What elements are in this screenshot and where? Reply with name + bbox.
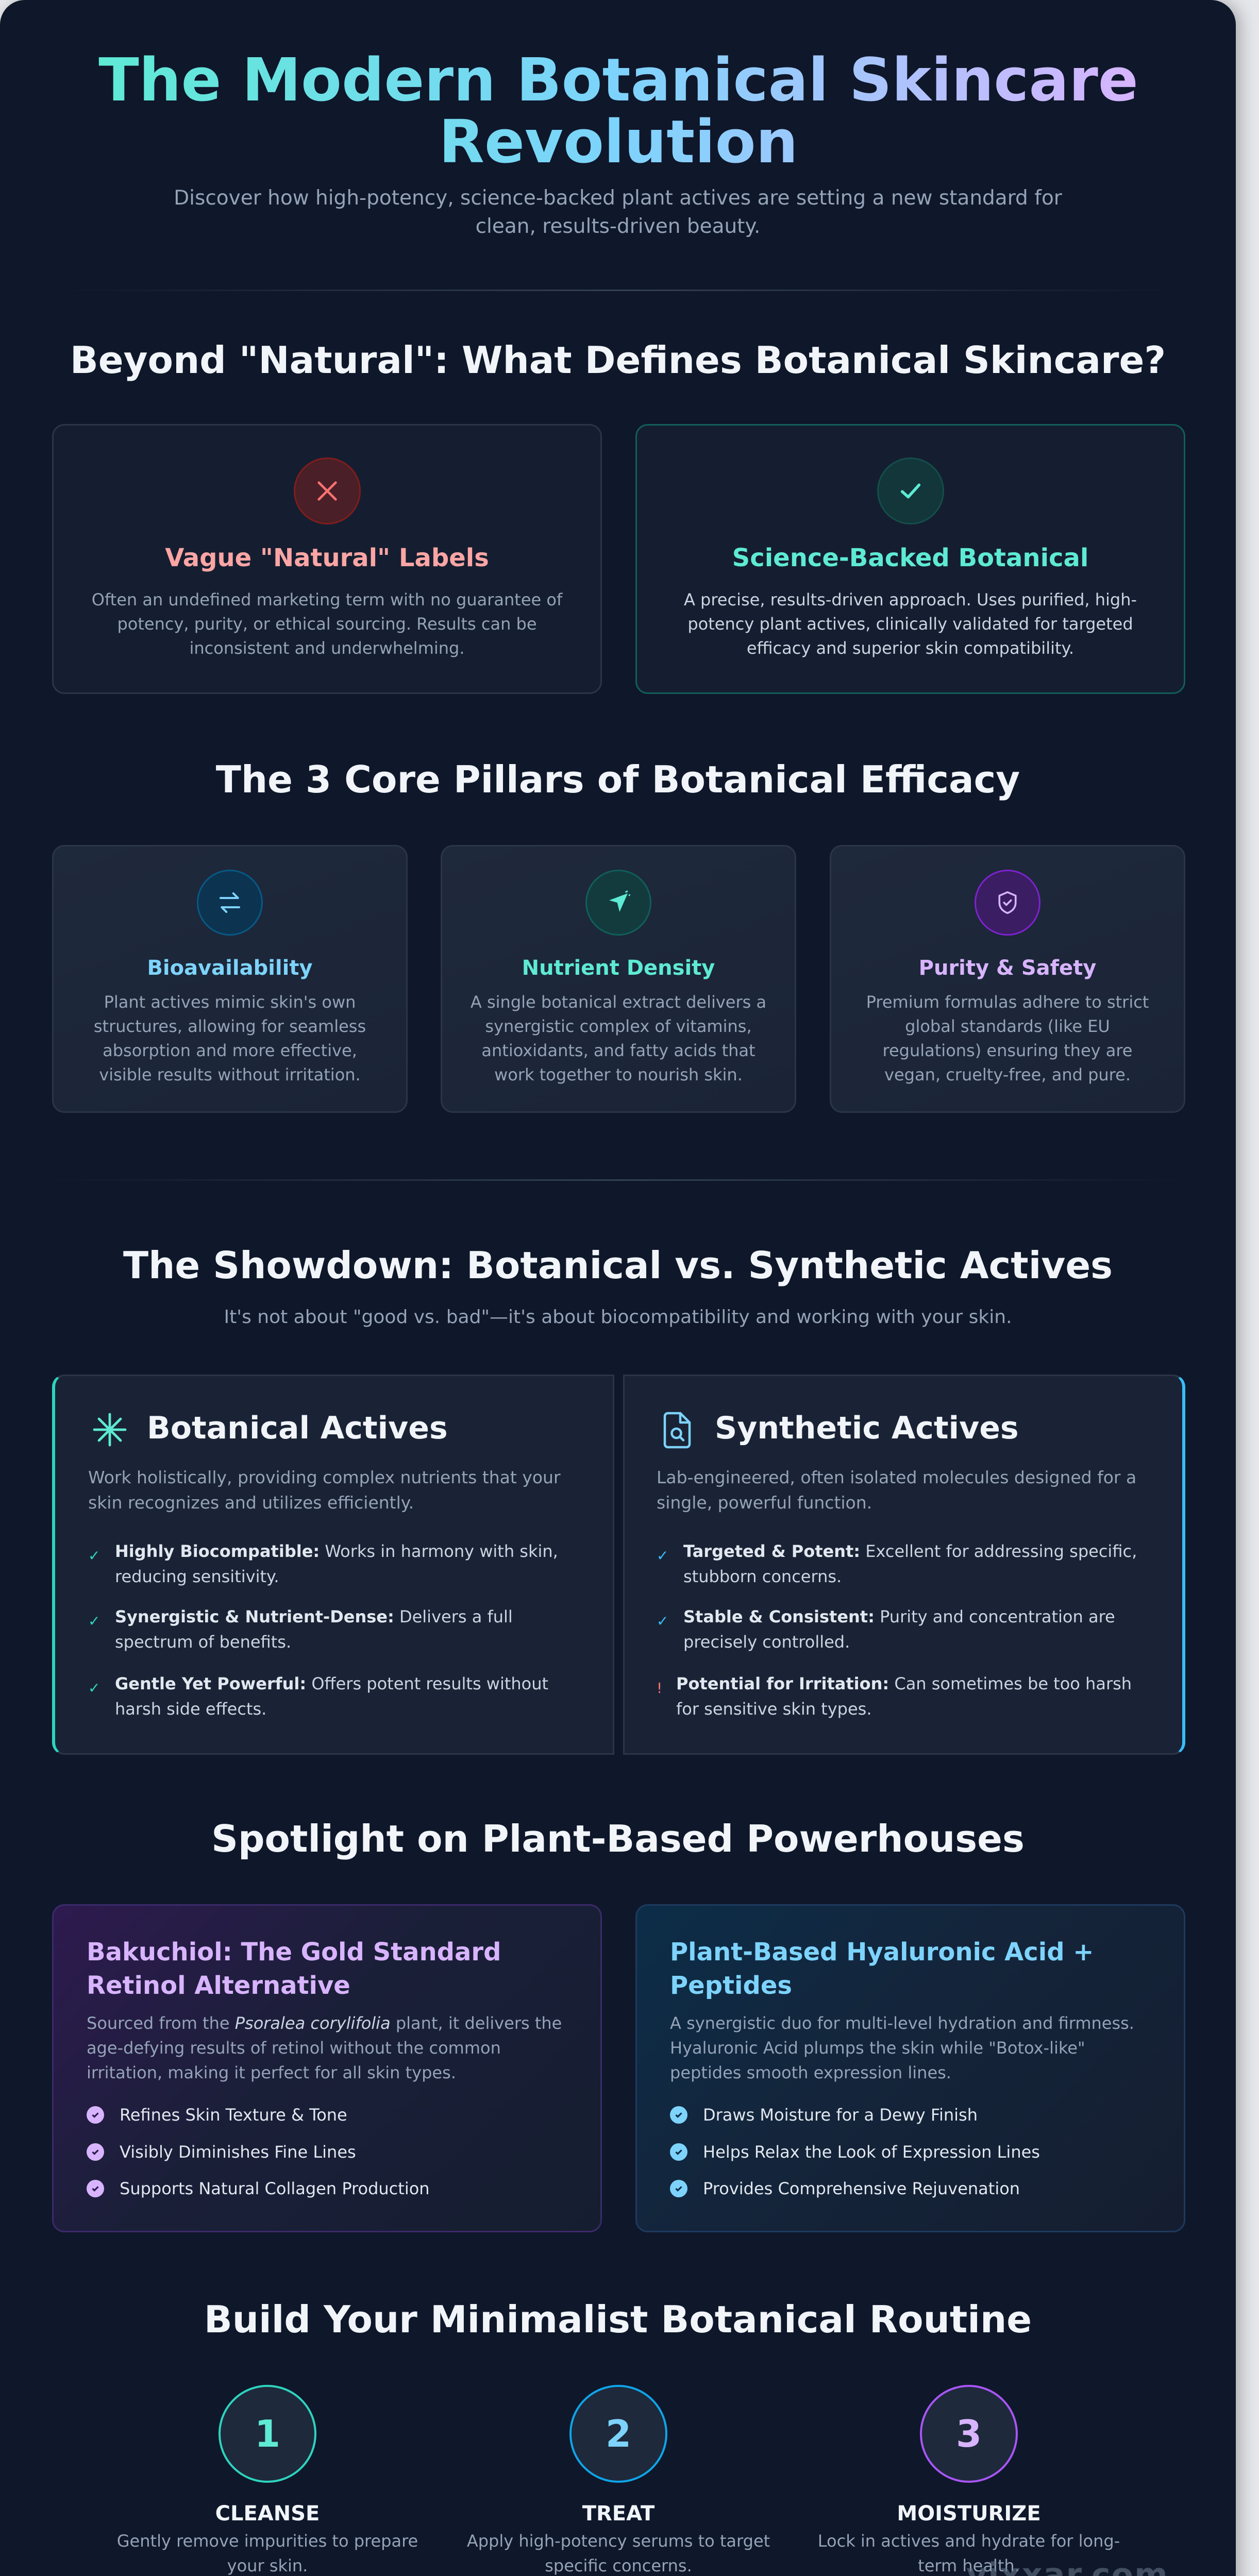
card title: Science-Backed Botanical <box>732 544 1088 572</box>
pillar: nutrient density <box>441 845 796 1113</box>
panel: botanical actives <box>52 1375 614 1755</box>
icon: sparkle <box>93 1413 127 1447</box>
bullets: Gentle Yet Powerful: Offers potent results without harsh side effects. <box>115 1674 548 1719</box>
bullets: Synergistic & Nutrient-Dense: Delivers a full spectrum of benefits. <box>115 1607 513 1652</box>
heading: routine: Build Your Minimalist Botanical Routine <box>204 2298 1032 2341</box>
panel: synthetic actives <box>623 1375 1185 1755</box>
bullets: Refines Skin Texture & Tone <box>120 2105 347 2125</box>
card title: Bakuchiol: The Gold Standard Retinol Alternative <box>87 1938 501 2000</box>
bullets: Stable & Consistent: Purity and concentration are precisely controlled. <box>683 1607 1115 1652</box>
pillar title: Purity & Safety <box>919 956 1096 980</box>
bullets <box>88 1541 558 1719</box>
icon: arrows <box>197 870 263 936</box>
icon: shield <box>975 870 1040 936</box>
bullets <box>670 2105 1040 2198</box>
bullets: Visibly Diminishes Fine Lines <box>120 2142 356 2162</box>
heading: spotlight: Spotlight on Plant-Based Powerhouses <box>211 1817 1025 1860</box>
pillar text: A single botanical extract delivers a synergistic complex of vitamins, antioxidants, and fatty acids that work together to nourish skin. <box>471 992 766 1084</box>
title <box>93 49 1144 173</box>
icon: x <box>294 457 361 524</box>
bullets: Helps Relax the Look of Expression Lines <box>703 2142 1040 2162</box>
bullets: ✓ <box>657 1613 668 1630</box>
step 2: treat <box>467 2385 770 2575</box>
card text: A precise, results-driven approach. Uses purified, high-potency plant actives, clinically validated for targeted efficacy and superior skin compatibility. <box>684 590 1137 658</box>
title: Revolution <box>439 108 798 177</box>
bullets: Targeted & Potent: Excellent for addressing specific, stubborn concerns. <box>683 1541 1137 1586</box>
description: Lab-engineered, often isolated molecules designed for a single, powerful function. <box>657 1467 1136 1513</box>
pillar text: Plant actives mimic skin's own structures, allowing for seamless absorption and more effective, visible results without irritation. <box>94 992 366 1084</box>
bullets: Highly Biocompatible: Works in harmony with skin, reducing sensitivity. <box>115 1541 558 1586</box>
bullets: ✓ <box>657 1547 668 1564</box>
bullets: ! <box>657 1680 662 1697</box>
bullets <box>87 2105 430 2198</box>
card: science-backed botanical <box>635 424 1185 694</box>
pillar title: Bioavailability <box>147 956 313 980</box>
step 1: cleanse <box>117 2385 418 2575</box>
step 1: cleanse: CLEANSE <box>215 2502 320 2526</box>
step 2: treat: Apply high-potency serums to target specific concerns. <box>467 2531 770 2575</box>
number circle: 1 <box>255 2412 280 2455</box>
number circle: 2 <box>606 2412 631 2455</box>
bullets: ✓ <box>88 1680 100 1697</box>
bullets: ✓ <box>88 1613 100 1630</box>
showdown subtitle: It's not about "good vs. bad"—it's about biocompatibility and working with your skin. <box>224 1307 1012 1328</box>
number circle <box>569 2385 667 2483</box>
icon: arrow <box>585 870 651 936</box>
icon: document search <box>664 1412 691 1449</box>
bullets: for sensitive skin types. <box>676 1699 871 1719</box>
step 3: moisturize: Lock in actives and hydrate for long-term health. <box>818 2531 1120 2575</box>
number circle <box>920 2385 1018 2483</box>
bullets: Potential for Irritation: Can sometimes be too harsh <box>676 1674 1132 1693</box>
heading: showdown: The Showdown: Botanical vs. Synthetic Actives <box>123 1244 1113 1287</box>
subtitle: Discover how high-potency, science-backed plant actives are setting a new standard for clean, results-driven beauty. <box>174 187 1062 238</box>
pillar title: Nutrient Density <box>522 956 715 980</box>
number circle <box>219 2385 316 2483</box>
bullets: Provides Comprehensive Rejuvenation <box>703 2179 1020 2198</box>
pillar: purity & safety <box>830 845 1185 1113</box>
card title: Vague "Natural" Labels <box>165 544 489 572</box>
icon: check <box>877 457 944 524</box>
card: vague natural labels <box>52 424 602 694</box>
step 1: cleanse: Gently remove impurities to prepare your skin. <box>117 2531 418 2575</box>
step 3: moisturize <box>818 2385 1120 2575</box>
header: Botanical Actives <box>147 1410 448 1446</box>
bullets: Draws Moisture for a Dewy Finish <box>703 2105 978 2125</box>
card: hyaluronic acid + peptides <box>635 1904 1185 2232</box>
title: The Modern Botanical Skincare <box>98 46 1138 115</box>
header: Synthetic Actives <box>715 1410 1019 1446</box>
heading: pillars: The 3 Core Pillars of Botanical Efficacy <box>216 758 1020 801</box>
number circle: 3 <box>956 2412 982 2455</box>
card text: Often an undefined marketing term with no guarantee of potency, purity, or ethical sourcing. Results can be inconsistent and underwhelming. <box>92 590 562 658</box>
card: bakuchiol <box>52 1904 602 2232</box>
description: Work holistically, providing complex nutrients that your skin recognizes and utilizes efficiently. <box>88 1467 561 1513</box>
card text: Sourced from the Psoralea corylifolia plant, it delivers the age-defying results of retinol without the common irritation, making it perfect for all skin types. <box>87 2013 562 2082</box>
pillar text: Premium formulas adhere to strict global standards (like EU regulations) ensuring they are vegan, cruelty-free, and pure. <box>866 992 1149 1084</box>
card title: Plant-Based Hyaluronic Acid + Peptides <box>670 1938 1094 2000</box>
step 3: moisturize: MOISTURIZE <box>897 2502 1041 2526</box>
heading: beyond natural: Beyond "Natural": What Defines Botanical Skincare? <box>70 338 1166 382</box>
card text: A synergistic duo for multi-level hydration and firmness. Hyaluronic Acid plumps the skin while "Botox-like" peptides smooth expression lines. <box>670 2013 1134 2082</box>
pillar: bioavailability <box>52 845 408 1113</box>
step 2: treat: TREAT <box>582 2502 654 2526</box>
bullets: ✓ <box>88 1547 100 1564</box>
bullets <box>657 1541 1137 1719</box>
bullets: Supports Natural Collagen Production <box>120 2179 430 2198</box>
